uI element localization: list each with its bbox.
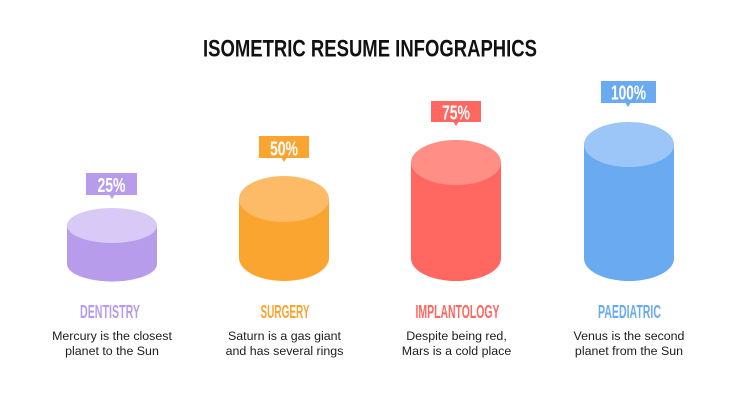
cylinder: paediatric [584,122,674,281]
cylinder: implantology [411,140,501,281]
heading: implantology: IMPLANTOLOGY [416,302,500,322]
badge: 50% [259,136,309,162]
cylinder: surgery [239,176,329,281]
badge: 25%: 25% [98,174,126,197]
description: surgery: and has several rings [226,344,343,358]
column: paediatric [574,81,685,358]
column: implantology [402,101,511,358]
badge: 50%: 50% [270,138,298,160]
heading: surgery: SURGERY [260,302,310,322]
badge: 25% [86,173,137,199]
cylinder: dentistry [67,208,157,282]
badge: 100%: 100% [611,82,646,104]
description: implantology: Mars is a cold place [402,344,511,358]
badge: 100% [601,81,656,107]
description: dentistry: planet to the Sun [65,344,159,358]
description: surgery: Saturn is a gas giant [228,329,341,343]
description: paediatric: planet from the Sun [575,344,683,358]
title: ISOMETRIC RESUME INFOGRAPHICS [203,36,537,62]
column: surgery [226,136,343,358]
heading: dentistry: DENTISTRY [80,302,140,322]
description: implantology: Despite being red, [406,329,507,343]
badge: 75% [431,101,481,126]
column: dentistry [52,173,172,358]
description: paediatric: Venus is the second [574,329,684,343]
description: dentistry: Mercury is the closest [52,329,172,343]
heading: paediatric: PAEDIATRIC [598,302,661,322]
badge: 75%: 75% [442,102,470,124]
